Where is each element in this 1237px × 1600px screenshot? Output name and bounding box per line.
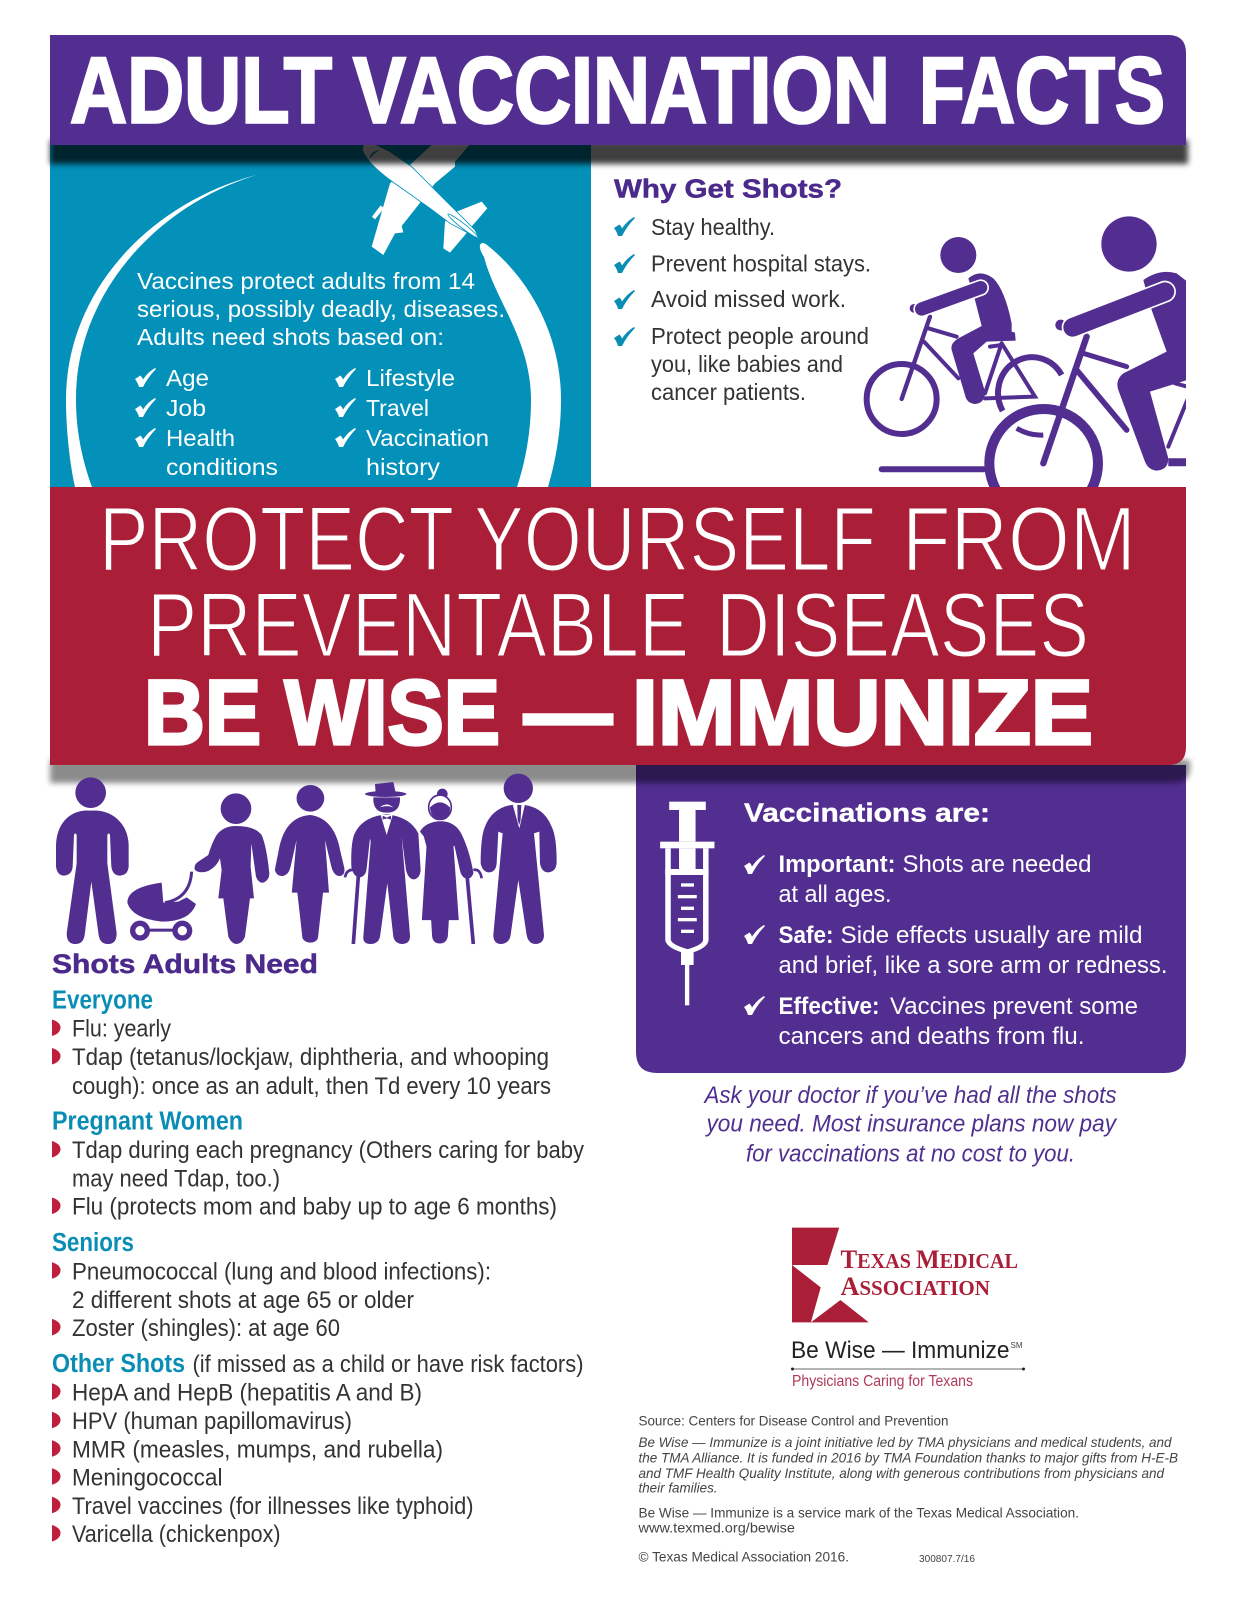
section: pregnant women: may need Tdap, too.) bbox=[72, 1166, 280, 1192]
italic funding note bbox=[638, 1434, 1178, 1496]
list item: effective: cancers and deaths from flu. bbox=[778, 1023, 1084, 1050]
title bbox=[70, 38, 1165, 142]
italic funding note: Be Wise — Immunize is a joint initiative led by TMA physicians and medical students, and bbox=[638, 1434, 1173, 1450]
list item: important: Shots are needed bbox=[902, 851, 1092, 878]
section: everyone: Flu: yearly bbox=[72, 1016, 171, 1042]
text block: vaccines protect adults: serious, possibly deadly, diseases. bbox=[137, 296, 505, 322]
section: everyone bbox=[52, 986, 551, 1100]
title: VACCINATION bbox=[353, 38, 890, 142]
title: ADULT bbox=[70, 38, 332, 142]
list item: safe: Safe: bbox=[778, 922, 834, 949]
swoosh: contrail circle right bbox=[480, 243, 561, 487]
text block: ask your doctor: you need. Most insurance plans now pay bbox=[705, 1110, 1118, 1138]
logo: Texas Medical Association bbox=[791, 1228, 1025, 1390]
copyright: © Texas Medical Association 2016. bbox=[638, 1548, 849, 1564]
list item: effective bbox=[744, 993, 1138, 1050]
section: pregnant women: Tdap during each pregnancy (Others caring for baby bbox=[72, 1137, 584, 1164]
banner line 2: DISEASES bbox=[716, 574, 1089, 676]
tagline: physicians caring for texans: Physicians Caring for Texans bbox=[792, 1373, 973, 1390]
print code: 300807.7/16 bbox=[919, 1553, 975, 1565]
heading: why get shots: Why Get Shots? bbox=[614, 174, 842, 204]
icon: man, woman and stroller bbox=[56, 777, 269, 944]
service mark: SM bbox=[1010, 1341, 1023, 1350]
text block: ask your doctor: Ask your doctor if you’ve had all the shots bbox=[703, 1082, 1116, 1109]
icon: second woman bbox=[275, 785, 344, 943]
section: seniors: Pneumococcal (lung and blood infections): bbox=[72, 1258, 491, 1285]
checklist: left column bbox=[135, 365, 278, 480]
text block: ask your doctor bbox=[703, 1082, 1118, 1168]
section: pregnant women bbox=[52, 1108, 584, 1220]
checklist: right column bbox=[335, 365, 489, 480]
source and credits bbox=[637, 1412, 1178, 1565]
list item: important bbox=[744, 851, 1092, 908]
wordmark: Association: ASSOCIATION bbox=[840, 1272, 990, 1301]
text block: ask your doctor: for vaccinations at no cost to you. bbox=[746, 1140, 1075, 1168]
panel: teal vaccines intro bbox=[50, 143, 591, 487]
icon: airplane bbox=[362, 143, 487, 255]
checklist: reasons: Stay healthy. bbox=[651, 214, 775, 240]
checklist: reasons: Prevent hospital stays. bbox=[651, 250, 871, 276]
heading: vaccinations are: Vaccinations are: bbox=[744, 798, 990, 828]
italic funding note: and TMF Health Quality Institute, along with generous contributions from physicians and bbox=[638, 1465, 1165, 1481]
service mark note bbox=[637, 1504, 1079, 1536]
section: seniors bbox=[52, 1229, 491, 1342]
banner line 2: PREVENTABLE bbox=[147, 574, 689, 676]
source line: Source: Centers for Disease Control and Prevention bbox=[638, 1412, 948, 1428]
tagline: be wise immunize: Be Wise — Immunize bbox=[791, 1337, 1010, 1364]
italic funding note: the TMA Alliance. It is funded in 2016 by TMA Foundation thanks to major gifts from H-E-B bbox=[638, 1450, 1178, 1466]
swoosh: contrail circle left bbox=[66, 175, 256, 487]
list item: safe: Side effects usually are mild bbox=[840, 922, 1142, 949]
text block: vaccines protect adults: Adults need shots based on: bbox=[137, 324, 444, 350]
section: other shots: (if missed as a child or have risk factors) bbox=[192, 1351, 584, 1378]
checklist: left column: Job bbox=[166, 395, 206, 421]
section: pregnant women: Pregnant Women bbox=[52, 1108, 243, 1136]
icon: syringe bbox=[660, 802, 714, 1005]
panel: vaccinations are bbox=[636, 765, 1186, 1073]
title banner bbox=[50, 35, 1186, 145]
section: other shots: MMR (measles, mumps, and rubella) bbox=[72, 1436, 443, 1463]
checklist: reasons: Protect people around bbox=[651, 323, 869, 349]
rule with end dots bbox=[791, 1368, 1025, 1370]
checklist: right column: Travel bbox=[366, 395, 429, 421]
section: everyone: cough): once as an adult, then Td every 10 years bbox=[72, 1073, 551, 1100]
icon: older man, older woman and man in suit bbox=[345, 774, 557, 944]
section: everyone: Tdap (tetanus/lockjaw, diphtheria, and whooping bbox=[72, 1044, 549, 1071]
banner line 1: PROTECT bbox=[99, 488, 454, 590]
checklist: reasons: you, like babies and bbox=[651, 351, 843, 377]
panel: why get shots bbox=[614, 174, 1187, 518]
banner line 3: — bbox=[524, 662, 612, 764]
list item: effective: Vaccines prevent some bbox=[890, 993, 1138, 1020]
red banner: protect yourself bbox=[50, 487, 1186, 765]
list item: important: at all ages. bbox=[778, 881, 892, 908]
panel: shots adults need bbox=[52, 949, 584, 1548]
list item: safe: and brief, like a sore arm or redness. bbox=[778, 952, 1168, 979]
checklist: left column: Health bbox=[166, 425, 235, 451]
banner line 1 bbox=[99, 488, 1136, 590]
checklist: left column: Age bbox=[166, 365, 209, 391]
banner line 3: BE WISE bbox=[144, 662, 500, 764]
checklist: reasons bbox=[614, 214, 871, 405]
section: other shots: Meningococcal bbox=[72, 1464, 222, 1491]
text block: vaccines protect adults bbox=[137, 268, 505, 350]
section: other shots: HPV (human papillomavirus) bbox=[72, 1408, 352, 1435]
checklist: left column: conditions bbox=[166, 454, 278, 480]
checklist: right column: Lifestyle bbox=[366, 365, 455, 391]
section: seniors: 2 different shots at age 65 or older bbox=[72, 1287, 414, 1314]
icon: two cyclists bbox=[867, 216, 1187, 518]
section: pregnant women: Flu (protects mom and baby up to age 6 months) bbox=[72, 1194, 557, 1220]
list item: important: Important: bbox=[778, 851, 896, 878]
text block: vaccines protect adults: Vaccines protect adults from 14 bbox=[137, 268, 475, 294]
section: other shots bbox=[52, 1350, 584, 1548]
section: other shots: Other Shots bbox=[52, 1350, 185, 1378]
checklist: right column: history bbox=[366, 454, 441, 480]
checklist: right column: Vaccination bbox=[366, 425, 489, 451]
section: other shots: Varicella (chickenpox) bbox=[72, 1521, 280, 1548]
list item: effective: Effective: bbox=[778, 993, 880, 1020]
checklist: reasons: cancer patients. bbox=[651, 379, 806, 405]
banner line 3: IMMUNIZE bbox=[632, 662, 1093, 764]
wordmark: Texas Medical: TEXAS MEDICAL bbox=[840, 1245, 1018, 1274]
shadow under header bbox=[50, 140, 1188, 164]
shadow under banner bbox=[50, 760, 1190, 783]
banner line 3 bbox=[144, 662, 1093, 764]
section: other shots: Travel vaccines (for illnesses like typhoid) bbox=[72, 1493, 474, 1520]
checklist: reasons: Avoid missed work. bbox=[651, 286, 846, 312]
heading: shots adults need: Shots Adults Need bbox=[52, 949, 318, 979]
section: seniors: Seniors bbox=[52, 1229, 134, 1257]
italic funding note: their families. bbox=[638, 1480, 718, 1496]
list item: safe bbox=[744, 922, 1168, 979]
section: other shots: HepA and HepB (hepatitis A and B) bbox=[72, 1379, 422, 1406]
icon: star mark bbox=[792, 1228, 869, 1322]
service mark note: Be Wise — Immunize is a service mark of the Texas Medical Association. bbox=[638, 1504, 1079, 1520]
section: everyone: Everyone bbox=[52, 986, 153, 1014]
title: FACTS bbox=[919, 38, 1165, 142]
section: seniors: Zoster (shingles): at age 60 bbox=[72, 1315, 340, 1342]
service mark note: www.texmed.org/bewise bbox=[637, 1520, 795, 1536]
banner line 1: FROM bbox=[902, 488, 1136, 590]
banner line 1: YOURSELF bbox=[474, 488, 876, 590]
